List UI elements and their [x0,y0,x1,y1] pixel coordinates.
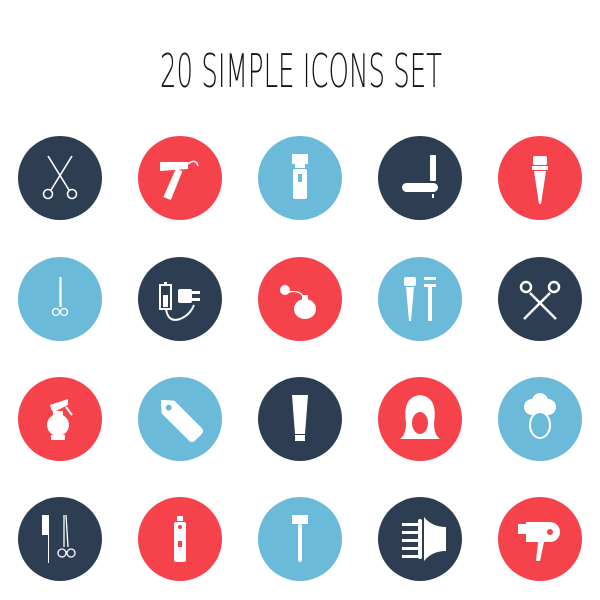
icon: hair dryer [498,497,582,581]
icon: dye brush [498,136,582,220]
icon: battery and plug [138,257,222,341]
icon: pocket knife [378,136,462,220]
icon: perfume bottle [258,257,342,341]
icon: brush and curler [378,257,462,341]
icon: woman hair [378,377,462,461]
icon: scissors [18,136,102,220]
icon: open scissors [498,257,582,341]
icon: comb and scissors [18,497,102,581]
icon: spray can [138,497,222,581]
icon: tag [138,377,222,461]
icon: thin scissors [18,257,102,341]
icon: round brush [378,497,462,581]
icon: spray bottle [18,377,102,461]
icon: cream tube [258,377,342,461]
icon: face with towel [498,377,582,461]
icon: straight razor [138,136,222,220]
icon: electric shaver [258,136,342,220]
icon: safety razor [258,497,342,581]
